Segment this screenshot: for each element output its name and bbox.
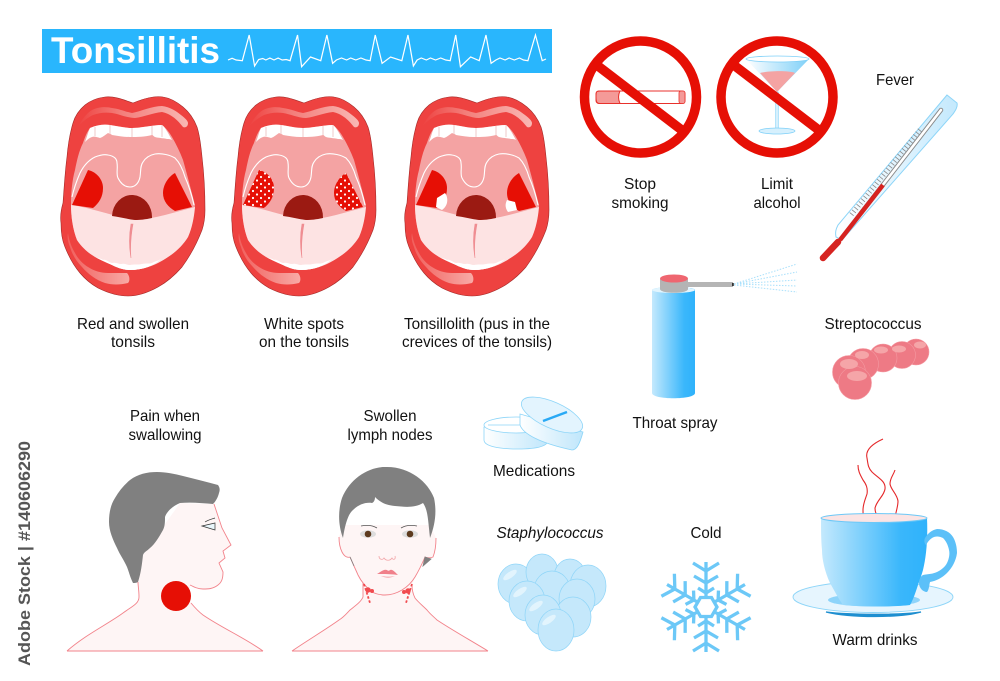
icon: snowflake	[661, 562, 751, 652]
label: stop smoking: smoking	[612, 195, 668, 212]
label: white spots: White spots	[264, 316, 344, 333]
label: tonsillolith	[402, 316, 552, 351]
label: red and swollen tonsils: tonsils	[111, 334, 155, 351]
label: throat spray: Throat spray	[632, 415, 718, 432]
label: stop smoking: Stop	[624, 176, 656, 193]
label: limit alcohol: Limit	[761, 176, 794, 193]
label: warm drinks: Warm drinks	[832, 632, 918, 649]
icon: streptococcus	[832, 339, 929, 400]
label: white spots	[259, 316, 349, 351]
label: streptococcus: Streptococcus	[824, 316, 922, 333]
icon: steam	[858, 439, 898, 521]
icon: throat spray	[652, 264, 797, 398]
icon: no smoking	[584, 41, 696, 153]
label: cold: Cold	[690, 525, 722, 542]
label: swollen lymph nodes: Swollen	[364, 408, 416, 425]
mouth: white spots	[232, 97, 376, 296]
figure: profile with neck pain	[67, 472, 263, 651]
label: pain when swallowing: swallowing	[128, 427, 202, 444]
label: tonsillolith: crevices of the tonsils)	[402, 334, 552, 351]
label: pain when swallowing: Pain when	[130, 408, 200, 425]
label: tonsillolith: Tonsillolith (pus in the	[404, 316, 550, 333]
label: medications: Medications	[493, 463, 575, 480]
mouth: tonsillolith	[405, 97, 549, 296]
label: swollen lymph nodes: lymph nodes	[348, 427, 432, 444]
vertical stock caption: Adobe Stock | #140606290	[15, 441, 34, 666]
label: white spots: on the tonsils	[259, 334, 349, 351]
title banner	[42, 29, 552, 73]
label: pain when swallowing	[128, 408, 202, 444]
label: staphylococcus: Staphylococcus	[496, 525, 604, 542]
icon: thermometer	[823, 95, 957, 258]
mouth: red and swollen tonsils	[61, 97, 205, 296]
figure: front with swollen lymph nodes	[292, 467, 488, 651]
label: swollen lymph nodes	[348, 408, 432, 444]
label: limit alcohol	[754, 176, 800, 212]
label: red and swollen tonsils: Red and swollen	[77, 316, 189, 333]
icon: limit alcohol	[721, 41, 833, 153]
label: stop smoking	[612, 176, 668, 212]
label: fever: Fever	[876, 72, 915, 89]
label: limit alcohol: alcohol	[754, 195, 800, 212]
icon: medications	[484, 390, 587, 450]
label: red and swollen tonsils	[77, 316, 189, 351]
title banner: Tonsillitis	[51, 30, 220, 71]
icon: staphylococcus	[498, 554, 606, 651]
icon: warm cup	[793, 514, 957, 616]
